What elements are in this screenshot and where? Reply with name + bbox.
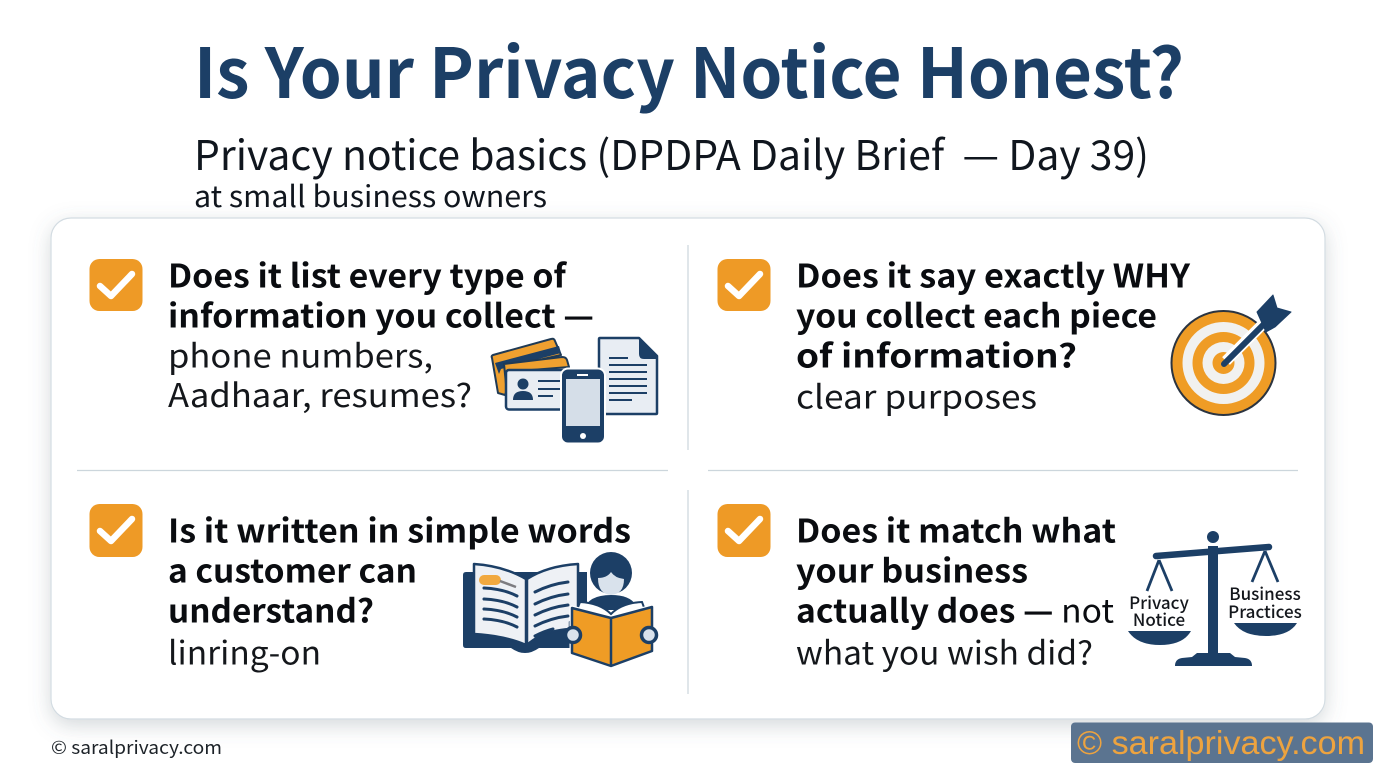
item 1: information types: [90, 250, 657, 444]
text: question 3: a customer can: [168, 546, 417, 592]
text: question 3: [168, 506, 631, 674]
icon: checkbox 3: [90, 504, 142, 557]
title: Is Your Privacy Notice Honest?: [194, 18, 1184, 118]
text: question 4: actually does — not: [796, 586, 1114, 632]
text: question 4: Does it match what: [796, 506, 1116, 552]
watermark badge: © saralprivacy.com: [1077, 724, 1365, 761]
text: question 2: you collect each piece: [796, 290, 1157, 338]
icon: reader with books: [463, 552, 656, 666]
label: business practices: Practices: [1228, 598, 1302, 623]
text: question 3: linring-on: [168, 628, 321, 674]
text: question 2: clear purposes: [796, 372, 1037, 418]
text: question 3: Is it written in simple words: [168, 506, 631, 552]
panel: checklist card: [51, 218, 1325, 719]
item 3: simple words: [90, 504, 656, 674]
text: question 1: information you collect —: [168, 290, 594, 338]
label: privacy notice: Privacy: [1129, 589, 1190, 614]
text: question 4: your business: [796, 546, 1028, 592]
subtitle: Privacy notice basics (DPDPA Daily Brief — Day 39): [194, 122, 1149, 182]
text: question 2: [796, 250, 1191, 418]
label: business practices: Business: [1229, 580, 1301, 605]
icon: cards, phone and document: [492, 338, 657, 444]
icon: checkbox 2: [718, 259, 770, 311]
text: question 1: Does it list every type of: [168, 250, 568, 298]
text: question 4: what you wish did?: [796, 628, 1093, 674]
icon: checkbox 4: [718, 504, 770, 557]
item 2: purposes: [718, 250, 1291, 418]
audience line: at small business owners: [194, 174, 547, 216]
text: question 2: Does it say exactly WHY: [796, 250, 1191, 298]
label: privacy notice: Notice: [1133, 606, 1185, 631]
text: question 3: understand?: [168, 586, 374, 632]
label: business practices: [1228, 580, 1302, 623]
icon: balance scale: [1128, 531, 1302, 666]
text: question 2: of information?: [796, 330, 1077, 378]
icon: target with arrow: [1172, 295, 1291, 415]
text: question 4: [796, 506, 1116, 674]
text: question 1: [168, 250, 594, 417]
text: question 1: phone numbers,: [168, 330, 433, 378]
label: privacy notice: [1129, 589, 1190, 631]
icon: checkbox 1: [90, 259, 142, 311]
footer copyright: © saralprivacy.com: [51, 734, 222, 760]
text: question 1: Aadhaar, resumes?: [168, 370, 472, 417]
item 4: matching practice: [718, 504, 1302, 674]
